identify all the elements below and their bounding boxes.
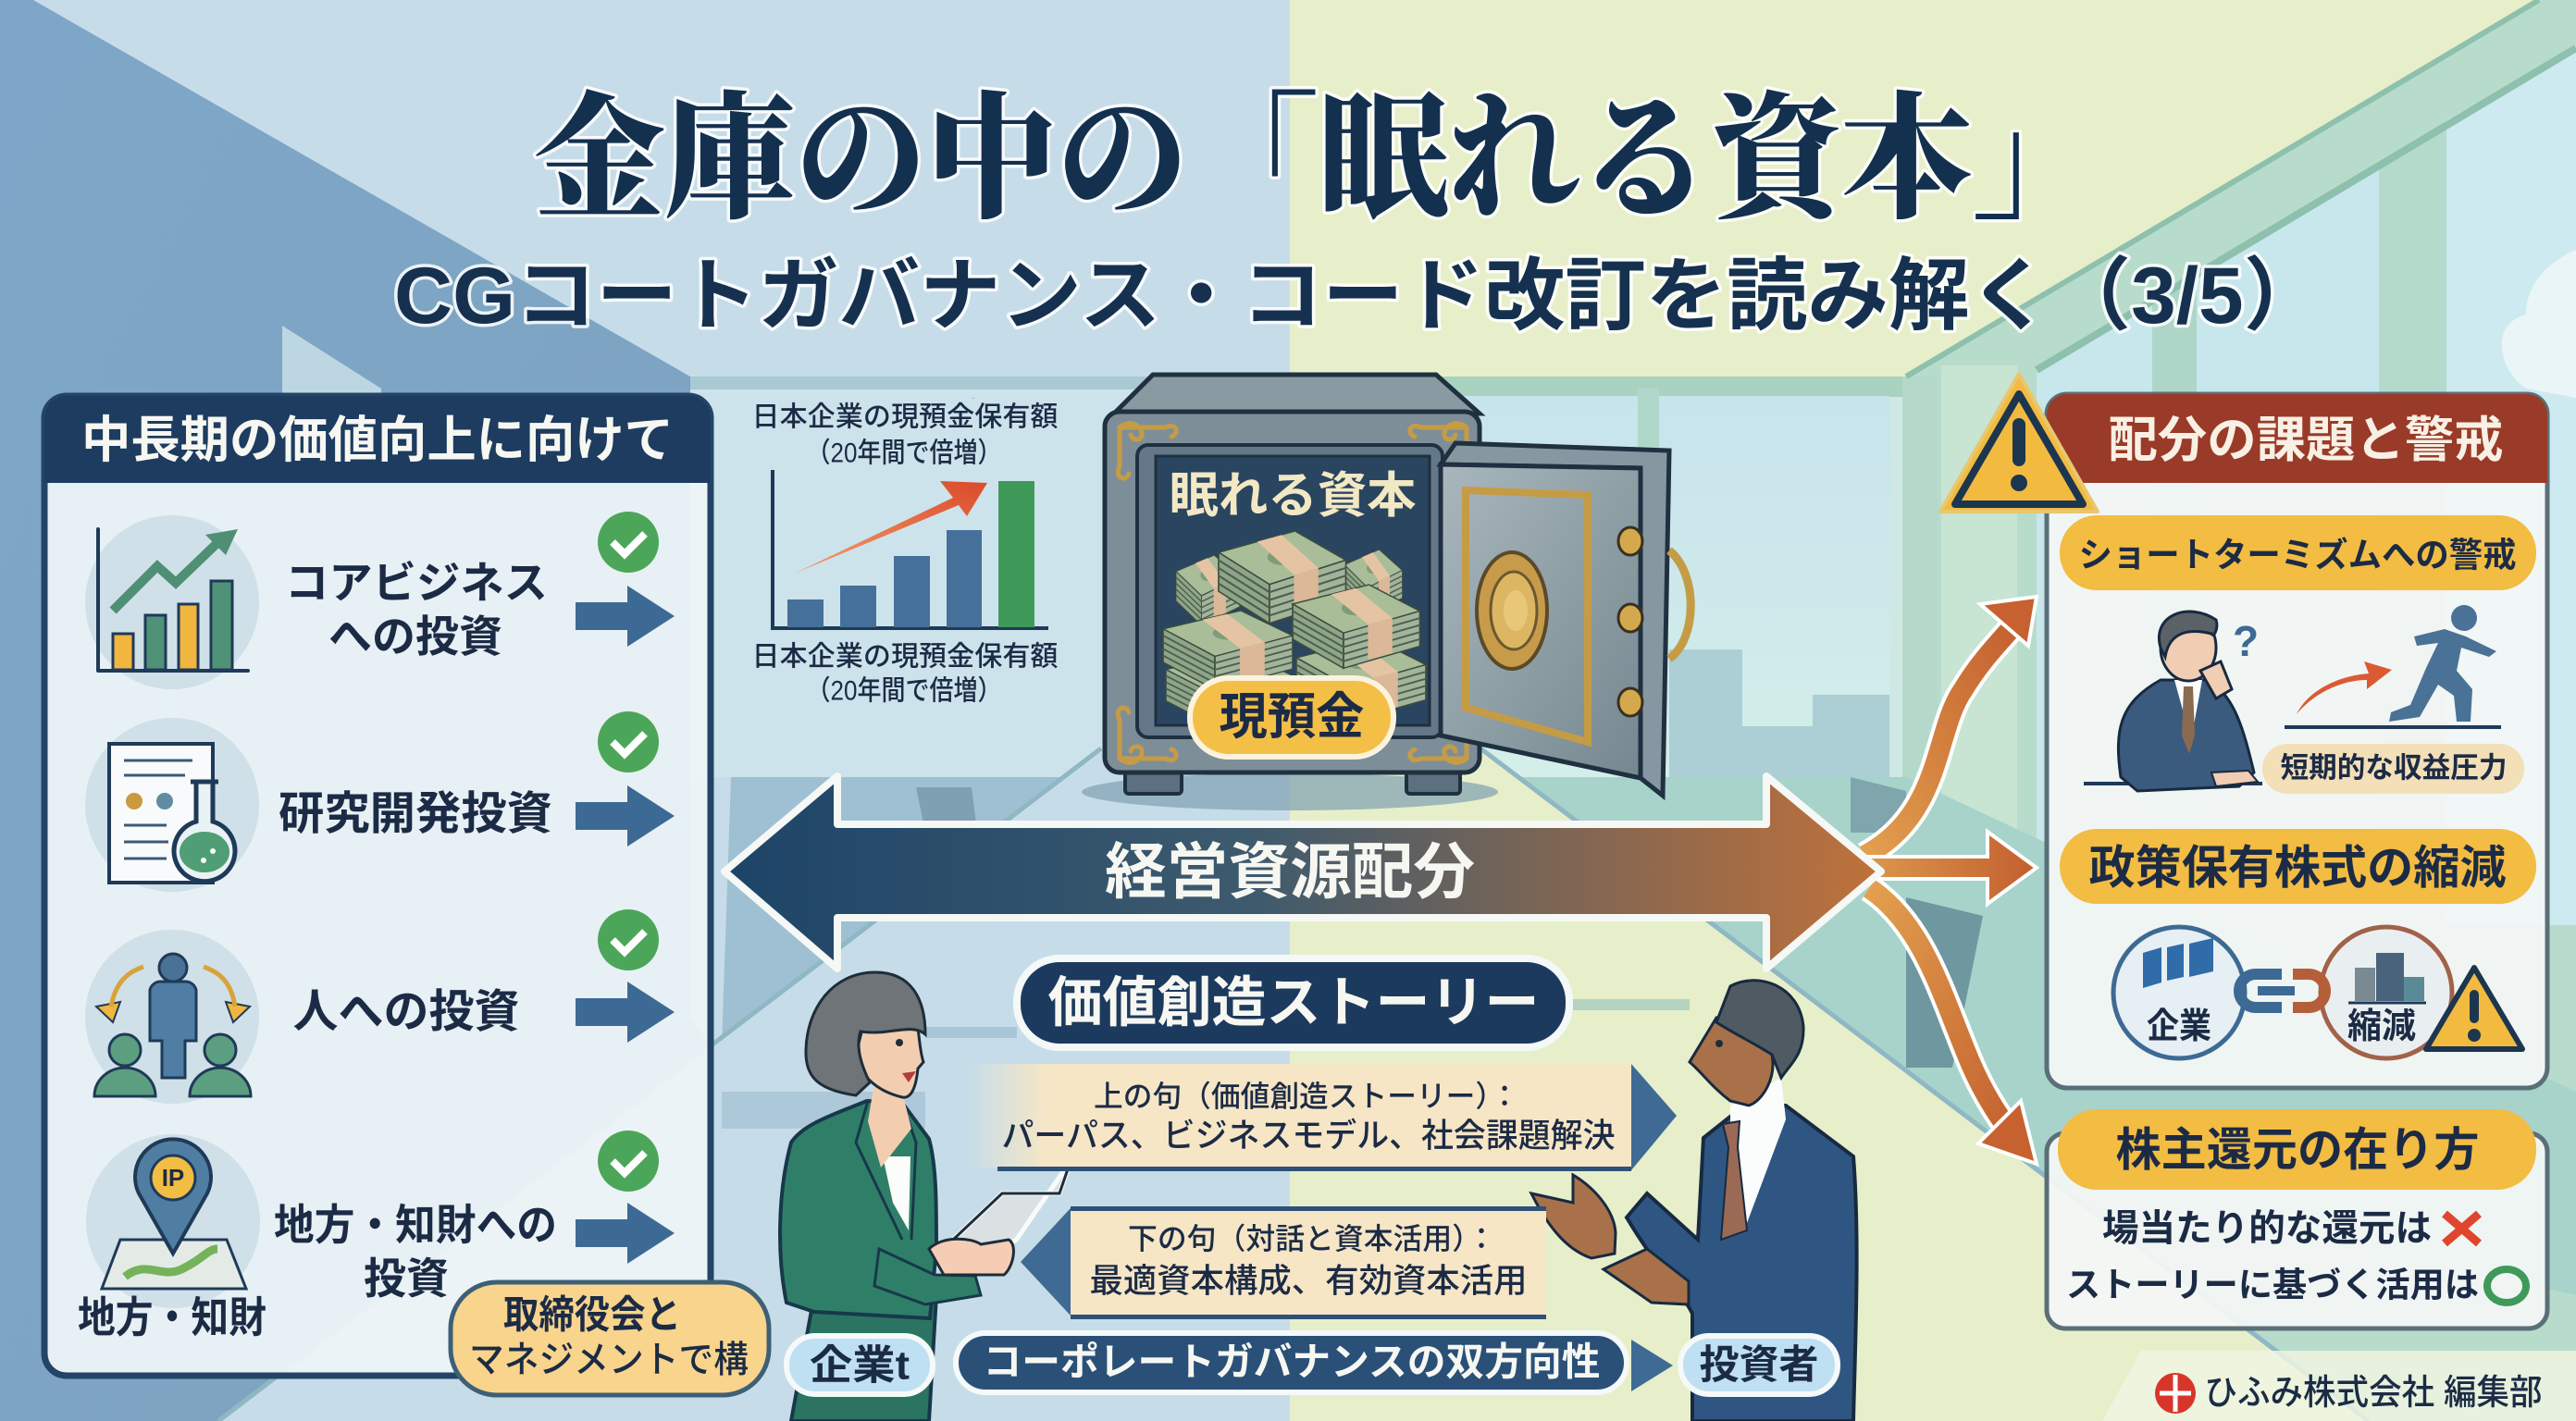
icon: thinking businessman: ? [2233,617,2259,665]
icon: people [85,930,259,1104]
check [598,711,659,772]
panel header [44,396,711,483]
item label: people investment: 人への投資 [292,987,520,1037]
arrow [1631,1340,1673,1391]
label: bidirectional governance [956,1333,1627,1392]
cash pill: 現預金 [1220,689,1364,745]
label: investor [1680,1336,1838,1394]
arrows: branches to warnings [1860,597,2037,1164]
callout: lower phrase: 下の句（対話と資本活用）： [1128,1222,1496,1255]
safe label: 眠れる資本 [1170,468,1416,524]
heading: value creation story: 価値創造ストーリー [1047,972,1540,1033]
icon caption: 地方・知財 [78,1293,266,1341]
person: investor [1531,981,1857,1421]
arrow [576,1203,675,1264]
panel: mid-long term value creation [44,396,711,1376]
item label: regional and IP: 投資 [364,1254,449,1303]
callout: lower phrase [1021,1206,1546,1319]
panel header: 配分の課題と警戒 [2108,413,2504,468]
icon: open safe with cash [1082,375,1690,810]
chart: cash holdings: （20年間で倍増） [807,675,1001,707]
icon: research document and flask [85,718,259,892]
panel header [2047,394,2547,483]
icon: company circle: 企業 [2147,1007,2211,1046]
label: short-term earnings pressure: 短期的な収益圧力 [2280,751,2508,785]
panel: shareholder returns [2047,1109,2547,1328]
icon: circle [2487,1269,2526,1303]
chart: cash holdings: 日本企業の現預金保有額 [751,402,1059,433]
sub-heading [2058,1109,2536,1190]
callout: lower phrase: 最適資本構成、有効資本活用 [1090,1262,1527,1299]
icon: warning [1940,374,2098,512]
icon: pressure arrow [2297,661,2392,714]
label: corporate [786,1336,933,1394]
icon: thinking businessman [2084,612,2262,791]
sub-heading: cross-shareholdings [2060,829,2536,904]
check [598,512,659,573]
callout: upper phrase [967,1064,1677,1171]
door [1441,443,1690,796]
label: short-term earnings pressure [2262,744,2524,794]
arrow [576,586,675,647]
item label: regional and IP: 地方・知財への [274,1201,557,1249]
chart: cash holdings: 日本企業の現預金保有額 [751,642,1059,672]
sub-heading: 株主還元の在り方 [2115,1124,2480,1176]
callout: board and management: 取締役会と [503,1293,681,1336]
sub-heading: cross-shareholdings: 政策保有株式の縮減 [2089,842,2506,894]
icon: small warning [2426,968,2522,1049]
icon: reduction circle: 縮減 [2347,1007,2416,1046]
icon: location pin and map: IP [162,1164,184,1192]
check [598,1131,659,1192]
heading: value creation story [1017,958,1569,1047]
arrow [576,982,675,1043]
icon: growth chart [85,515,259,689]
panel: allocation issues [1940,374,2547,1088]
icon: company circle [2113,927,2245,1058]
icon: cross [2445,1214,2479,1243]
title: 金庫の中の「眠れる資本」 [534,50,2103,246]
arrow: management resource allocation: 経営資源配分 [1105,837,1475,906]
icon: reduction circle [2321,927,2452,1058]
cash stacks [1163,531,1426,727]
label: bidirectional governance: コーポレートガバナンスの双方向性 [983,1340,1601,1384]
text: ad hoc returns: 場当たり的な還元は [2102,1208,2432,1249]
icon: chain [2239,974,2325,1007]
subtitle: CGコートガバナンス・コード改訂を読み解く（3/5） [394,252,2324,340]
label: corporate: 企業t [810,1343,910,1388]
chart: cash holdings: （20年間で倍増） [807,439,1001,468]
icon: runner [2285,605,2501,727]
arrow [576,785,675,846]
person: woman executive [780,972,1071,1421]
item label: R&D: 研究開発投資 [279,789,552,839]
check [598,909,659,970]
item label: core business: への投資 [328,612,502,661]
label: investor: 投資者 [1699,1343,1819,1388]
item label: regional and IP [274,1201,557,1303]
callout: upper phrase: パーパス、ビジネスモデル、社会課題解決 [1001,1116,1616,1155]
callout: board and management: マネジメントで構 [469,1340,749,1380]
chart: cash holdings [751,402,1059,707]
sub-heading: short-termism: ショートターミズムへの警戒 [2078,537,2517,574]
item label: core business: コアビジネス [285,559,548,607]
arrow: management resource allocation [724,776,1881,969]
icon: location pin and map [86,1134,260,1308]
panel header: 中長期の価値向上に向けて [81,413,674,468]
sub-heading: short-termism [2060,515,2536,590]
item label: core business [285,559,548,661]
callout: board and management [451,1282,769,1395]
footer: publisher: ひふみ株式会社 編集部 [2204,1374,2543,1413]
callout: upper phrase: 上の句（価値創造ストーリー）： [1094,1080,1519,1113]
text: story-based use: ストーリーに基づく活用は [2066,1266,2479,1304]
cash pill [1190,678,1393,757]
